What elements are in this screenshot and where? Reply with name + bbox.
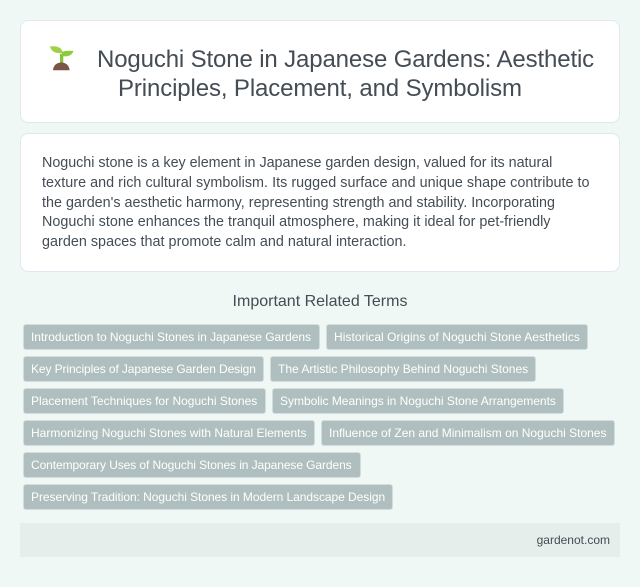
tag: Placement Techniques for Noguchi Stones [31, 394, 257, 408]
tag [23, 356, 264, 382]
description text: the garden's aesthetic harmony, representing strength and stability. Incorporating [42, 195, 555, 211]
tag: Influence of Zen and Minimalism on Noguchi Stones [329, 426, 606, 440]
description text: Noguchi stone enhances the tranquil atmosphere, making it ideal for pet-friendly [42, 214, 550, 230]
tag [321, 420, 615, 446]
header panel [20, 20, 620, 123]
tag [272, 388, 564, 414]
footer source: gardenot.com [537, 533, 610, 547]
title: Principles, Placement, and Symbolism [118, 74, 522, 102]
section heading: Important Related Terms [233, 293, 407, 310]
tag: The Artistic Philosophy Behind Noguchi Stones [278, 362, 528, 376]
tag [326, 324, 588, 350]
tag: Harmonizing Noguchi Stones with Natural Elements [31, 426, 306, 440]
footer bar [20, 523, 620, 557]
tag: Historical Origins of Noguchi Stone Aesthetics [334, 330, 580, 344]
tag [23, 324, 320, 350]
description text: Noguchi stone is a key element in Japanese garden design, valued for its natural [42, 154, 552, 170]
description panel [20, 133, 620, 272]
icon: seedling [50, 46, 74, 70]
tag: Contemporary Uses of Noguchi Stones in Japanese Gardens [31, 458, 352, 472]
tag [23, 484, 393, 510]
title: Noguchi Stone in Japanese Gardens: Aesthetic [97, 46, 594, 72]
description text: texture and rich cultural symbolism. Its rugged surface and unique shape contribute to [42, 175, 590, 191]
related terms tags [23, 324, 615, 510]
tag: Introduction to Noguchi Stones in Japanese Gardens [31, 330, 311, 344]
tag [270, 356, 536, 382]
description text: garden spaces that promote calm and natural interaction. [42, 234, 406, 250]
tag [23, 452, 361, 478]
tag [23, 420, 315, 446]
tag: Preserving Tradition: Noguchi Stones in Modern Landscape Design [31, 490, 385, 504]
tag: Symbolic Meanings in Noguchi Stone Arrangements [280, 394, 556, 408]
description text [42, 154, 590, 250]
tag: Key Principles of Japanese Garden Design [31, 362, 256, 376]
tag [23, 388, 266, 414]
title [97, 46, 594, 102]
